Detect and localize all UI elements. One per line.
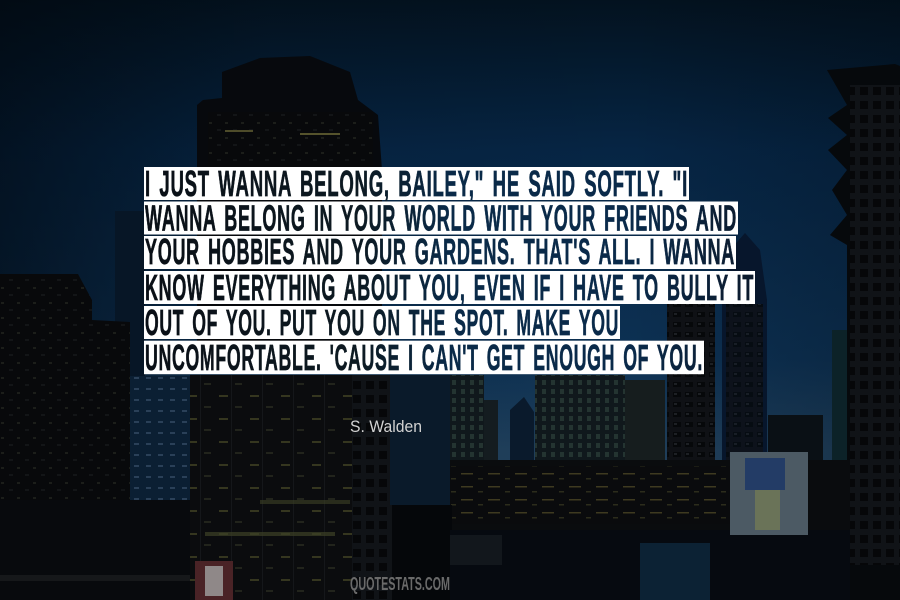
quote line 5 xyxy=(144,302,620,343)
author name: S. Walden xyxy=(350,417,422,436)
watermark: QUOTESTATS.COM xyxy=(350,574,450,594)
quote text block xyxy=(144,163,755,378)
